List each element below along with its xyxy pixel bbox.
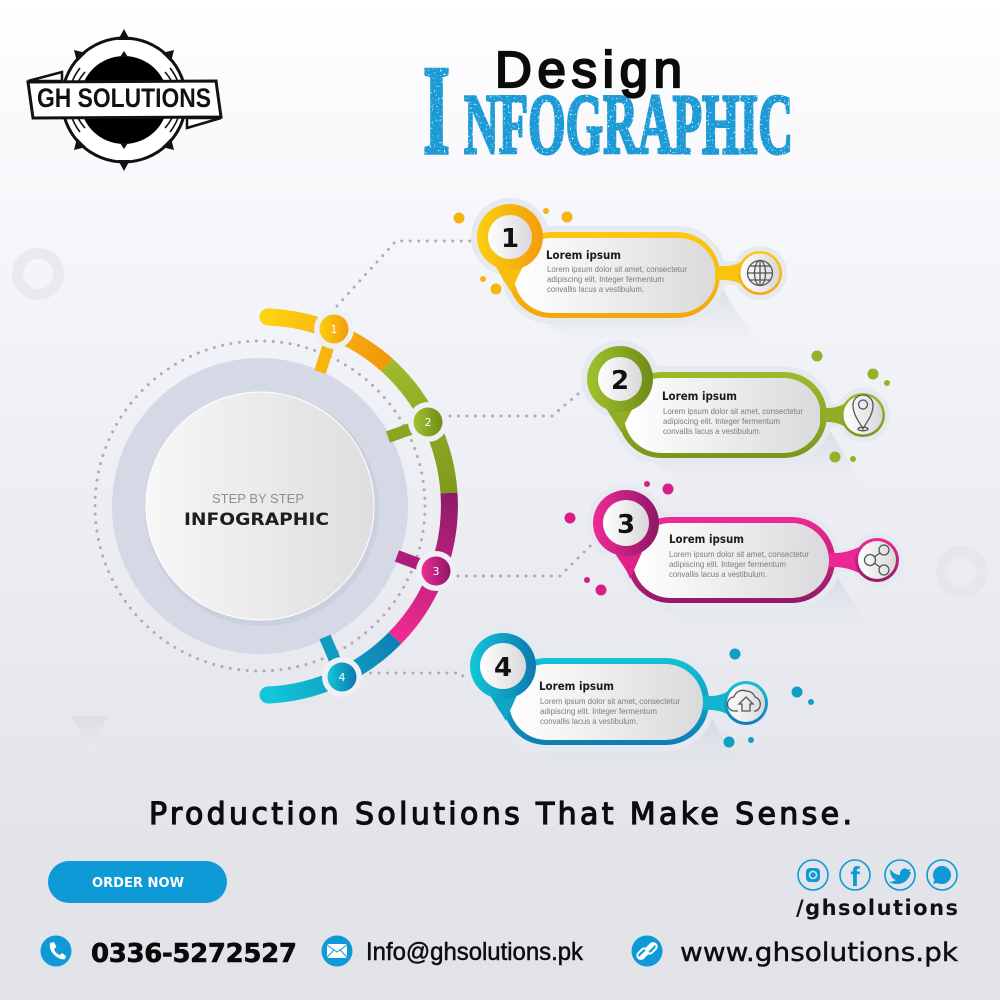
card 4 dots (724, 648, 814, 748)
card 4 (470, 633, 768, 776)
website contact: www.ghsolutions.pk (680, 938, 958, 968)
card 2 dots (812, 350, 890, 462)
title: INFOGRAPHIC (423, 41, 793, 181)
card 2 text: Lorem ipsum (662, 389, 737, 403)
arc badge 2 (408, 402, 448, 442)
card 1 text: adipiscing elit. Integer fermentum (547, 274, 664, 284)
order now button: ORDER NOW (92, 876, 184, 891)
icon: globe (748, 260, 772, 286)
card 3 dots (564, 481, 674, 596)
arc badge 1: 1 (330, 323, 338, 336)
card 4 text: adipiscing elit. Integer fermentum (540, 706, 657, 716)
arc badge 1 (314, 309, 354, 349)
center text: INFOGRAPHIC (184, 510, 329, 530)
logo: GH Solutions: GH SOLUTIONS (37, 83, 211, 113)
decorative ring right (942, 552, 982, 592)
icon: cloud upload (727, 690, 760, 711)
card 4 text: Lorem ipsum (539, 679, 614, 693)
order now button (48, 861, 227, 903)
email contact: Info@ghsolutions.pk (366, 938, 583, 966)
card 3 text (669, 532, 809, 579)
card 1 dots (454, 208, 572, 294)
card 3 (593, 490, 899, 633)
arc badge 4: 4 (338, 671, 346, 684)
decorative ring left (18, 254, 58, 294)
card 1: 1 (501, 224, 519, 254)
card 1 text: Lorem ipsum dolor sit amet, consectetur (547, 264, 687, 274)
card 4 text: Lorem ipsum dolor sit amet, consectetur (540, 696, 680, 706)
card 2: 2 (611, 366, 629, 396)
segmented outer arc (268, 317, 449, 695)
card 2 text: Lorem ipsum dolor sit amet, consectetur (663, 406, 803, 416)
logo: GH Solutions (28, 29, 221, 171)
title: Design: Design (495, 41, 682, 98)
social icons (798, 860, 957, 892)
card 4: 4 (494, 653, 512, 683)
title: INFOGRAPHIC: I (423, 41, 450, 181)
card 1 text: convallis lacus a vestibulum. (547, 284, 644, 294)
social handle: /ghsolutions (796, 896, 958, 920)
arc badge 3: 3 (432, 565, 440, 578)
card 1 text (546, 248, 687, 294)
card 3 text: Lorem ipsum dolor sit amet, consectetur (669, 549, 809, 559)
icon: location pin (853, 395, 873, 431)
card 2 text: convallis lacus a vestibulum. (663, 426, 761, 436)
card 1 (477, 204, 782, 347)
decorative triangle (72, 716, 108, 752)
card 4 text (539, 679, 680, 726)
card 3 text: Lorem ipsum (669, 532, 744, 546)
center text (184, 492, 329, 530)
center text: STEP BY STEP (212, 492, 304, 506)
card 1 text: Lorem ipsum (546, 248, 621, 262)
arc badge 2: 2 (424, 416, 432, 429)
card 2 (587, 346, 885, 489)
card 3 text: adipiscing elit. Integer fermentum (669, 559, 786, 569)
card 3: 3 (617, 510, 635, 540)
card 3 text: convallis lacus a vestibulum. (669, 569, 767, 579)
card 4 text: convallis lacus a vestibulum. (540, 716, 638, 726)
card 2 text (662, 389, 803, 436)
arc badge 4 (322, 657, 362, 697)
central circle (112, 358, 408, 654)
card 2 text: adipiscing elit. Integer fermentum (663, 416, 780, 426)
icon: share (864, 545, 889, 575)
dotted connector lines (95, 241, 592, 692)
phone contact: 0336-5272527 (91, 939, 297, 969)
tagline: Production Solutions That Make Sense. (149, 797, 852, 832)
social icons: f (850, 861, 860, 892)
arc badge 3 (416, 551, 456, 591)
